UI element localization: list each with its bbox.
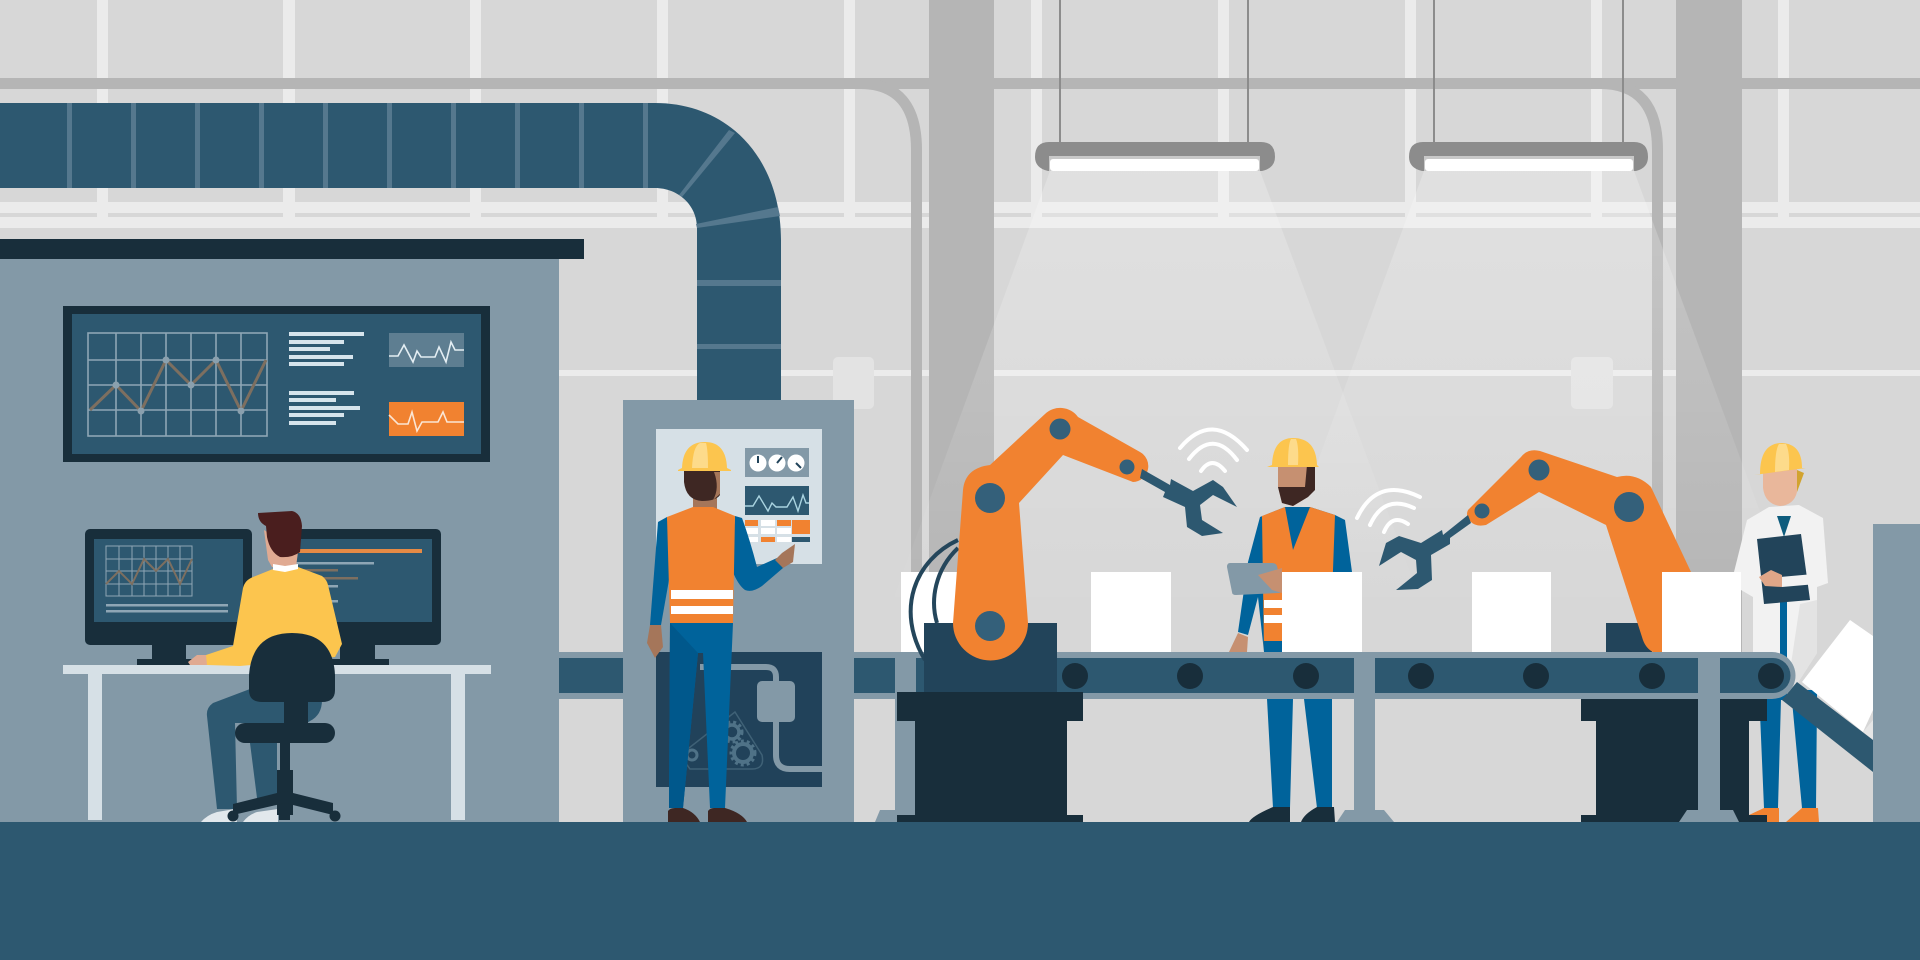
belt segment right of cabinet — [854, 652, 895, 699]
trousers — [669, 623, 733, 808]
orange shoes — [1749, 808, 1819, 822]
orange pulse panel — [389, 402, 464, 436]
trousers — [1759, 690, 1817, 808]
hair — [258, 511, 302, 557]
panel operator — [647, 442, 795, 822]
lower hand — [1229, 633, 1248, 652]
right desktop monitor — [285, 529, 441, 665]
gauges — [745, 448, 809, 477]
robot 2 pedestal — [1581, 699, 1767, 822]
line chart — [88, 333, 267, 436]
wifi signal — [1357, 490, 1420, 532]
hard hat — [678, 442, 731, 471]
wifi signal — [1180, 429, 1247, 471]
overhead pipes — [0, 84, 1920, 652]
gray pulse panel — [389, 333, 464, 367]
steel columns — [929, 0, 1742, 652]
shoes — [668, 808, 747, 822]
left arm — [650, 517, 672, 625]
safety vest — [667, 507, 735, 623]
hand — [188, 655, 207, 665]
conveyor belt — [895, 652, 1795, 699]
arms and shirt — [1238, 507, 1352, 652]
right wall block — [1873, 524, 1920, 822]
conveyor leg 1 — [875, 652, 916, 822]
worker with tablet — [1227, 438, 1352, 822]
data lines — [289, 332, 364, 425]
robot 1 pedestal — [897, 692, 1083, 822]
control cabinet — [623, 400, 854, 822]
product box far right — [1662, 572, 1741, 652]
neck — [264, 530, 298, 567]
head — [1763, 468, 1797, 506]
trousers — [1267, 652, 1332, 808]
control panel — [656, 429, 822, 564]
head — [684, 471, 720, 501]
control room wall — [0, 259, 559, 822]
scientist with clipboard — [1734, 443, 1828, 822]
left desktop monitor — [85, 529, 252, 665]
hanging lamp 1 — [1035, 0, 1275, 171]
factory floor — [0, 822, 1920, 960]
coat shade — [1788, 600, 1817, 684]
joints — [975, 418, 1134, 641]
safety vest — [1262, 507, 1335, 652]
shoes — [1249, 807, 1335, 822]
sleeve — [1780, 573, 1828, 587]
base upper — [924, 623, 1057, 692]
tablet — [1227, 563, 1282, 595]
wall monitoring screen — [63, 306, 490, 462]
seated operator — [188, 511, 342, 822]
product box right of worker — [1472, 572, 1551, 652]
base upper — [1606, 623, 1652, 652]
joints — [1474, 460, 1644, 522]
office chair — [228, 633, 340, 822]
collar — [273, 564, 298, 572]
outfeed chute and falling box — [1782, 620, 1873, 772]
ventilation duct — [0, 103, 781, 400]
hard hat — [1754, 443, 1806, 475]
conveyor leg 3 — [1679, 652, 1739, 822]
button grid — [745, 520, 810, 542]
head — [1278, 465, 1315, 506]
light beams — [874, 171, 1812, 652]
control room roof — [0, 239, 584, 259]
hanging lamp 2 — [1409, 0, 1648, 171]
clipboard — [1757, 534, 1810, 604]
product boxes left — [901, 572, 1171, 652]
tablet hand — [1258, 568, 1282, 593]
gripper — [1379, 515, 1471, 590]
cables — [911, 540, 958, 660]
robot arm 1 — [911, 408, 1247, 692]
shoes — [201, 809, 278, 822]
arm body — [1467, 450, 1691, 652]
lab coat — [1734, 505, 1828, 684]
arm body — [953, 408, 1148, 661]
tie strip — [1780, 600, 1787, 700]
product box center — [1282, 572, 1362, 652]
machine hatch — [656, 652, 822, 787]
wall plates — [833, 357, 1613, 409]
shirt — [1777, 516, 1791, 537]
desk — [63, 665, 491, 820]
neck — [693, 495, 717, 509]
conveyor leg 2 — [1337, 652, 1394, 822]
rollers — [1062, 663, 1784, 689]
gripper — [1140, 469, 1237, 536]
belt segment left of cabinet — [559, 652, 623, 699]
pulse readout — [745, 486, 809, 515]
sweater — [206, 567, 342, 666]
right arm — [732, 516, 783, 591]
legs — [207, 689, 322, 809]
hard hat — [1267, 438, 1319, 467]
robot arm 2 — [1357, 450, 1691, 652]
hand — [1759, 570, 1782, 587]
